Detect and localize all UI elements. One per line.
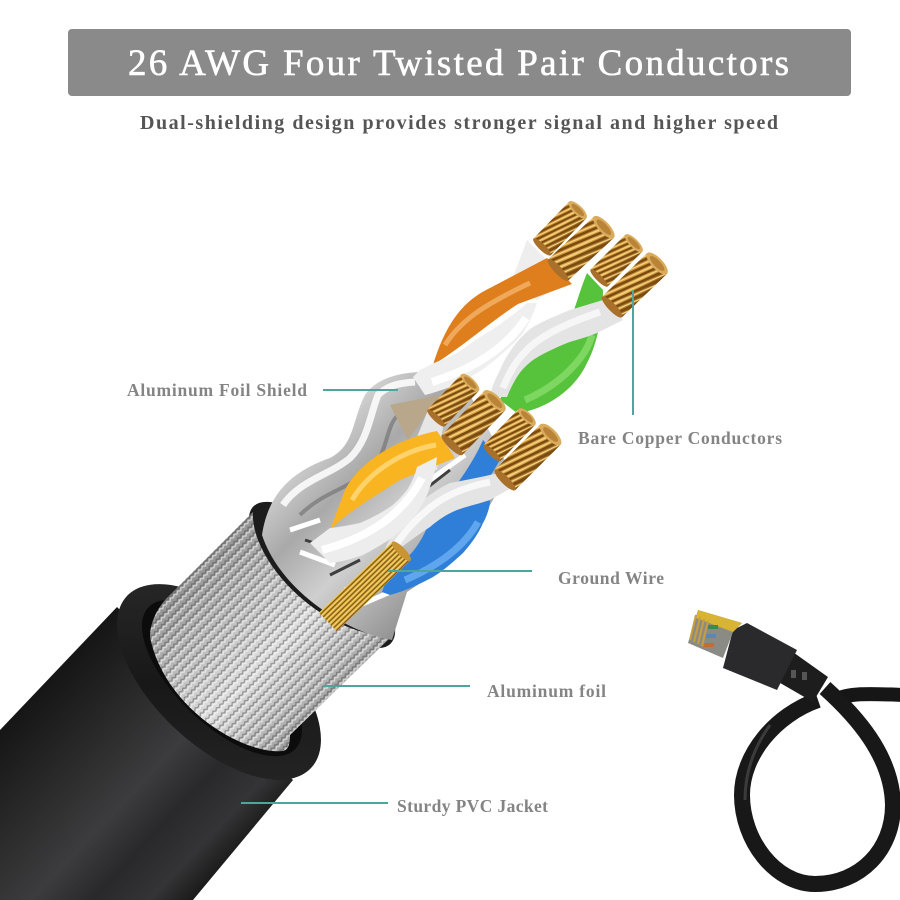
cable cross-section illustration: [0, 198, 671, 900]
subtitle: Dual-shielding design provides stronger signal and higher speed: [140, 112, 778, 134]
label: bare copper conductors: Bare Copper Conductors: [578, 428, 782, 448]
coiled black cable: [742, 688, 900, 884]
aluminum foil shield: [262, 372, 510, 640]
lower pair: yellow and white, blue and white: [310, 410, 513, 595]
label: ground wire: Ground Wire: [558, 568, 664, 588]
connector housing: [723, 623, 797, 690]
label: aluminum foil: Aluminum foil: [487, 681, 606, 701]
strain relief boot: [775, 650, 828, 702]
label: sturdy PVC jacket: Sturdy PVC Jacket: [397, 796, 548, 816]
title banner: [68, 29, 851, 96]
label: aluminum foil shield: Aluminum Foil Shield: [127, 380, 307, 400]
braided aluminum foil sleeve: [150, 481, 416, 751]
black PVC jacket: [0, 549, 355, 900]
icon: ethernet patch cable with RJ45 plug: [688, 610, 900, 884]
ground wire: [319, 539, 413, 631]
title banner: 26 AWG Four Twisted Pair Conductors: [128, 43, 789, 84]
upper pair: orange and white, green and white: [413, 240, 623, 413]
copper conductor tips: [425, 198, 671, 493]
gold RJ45 plug: [688, 610, 742, 658]
